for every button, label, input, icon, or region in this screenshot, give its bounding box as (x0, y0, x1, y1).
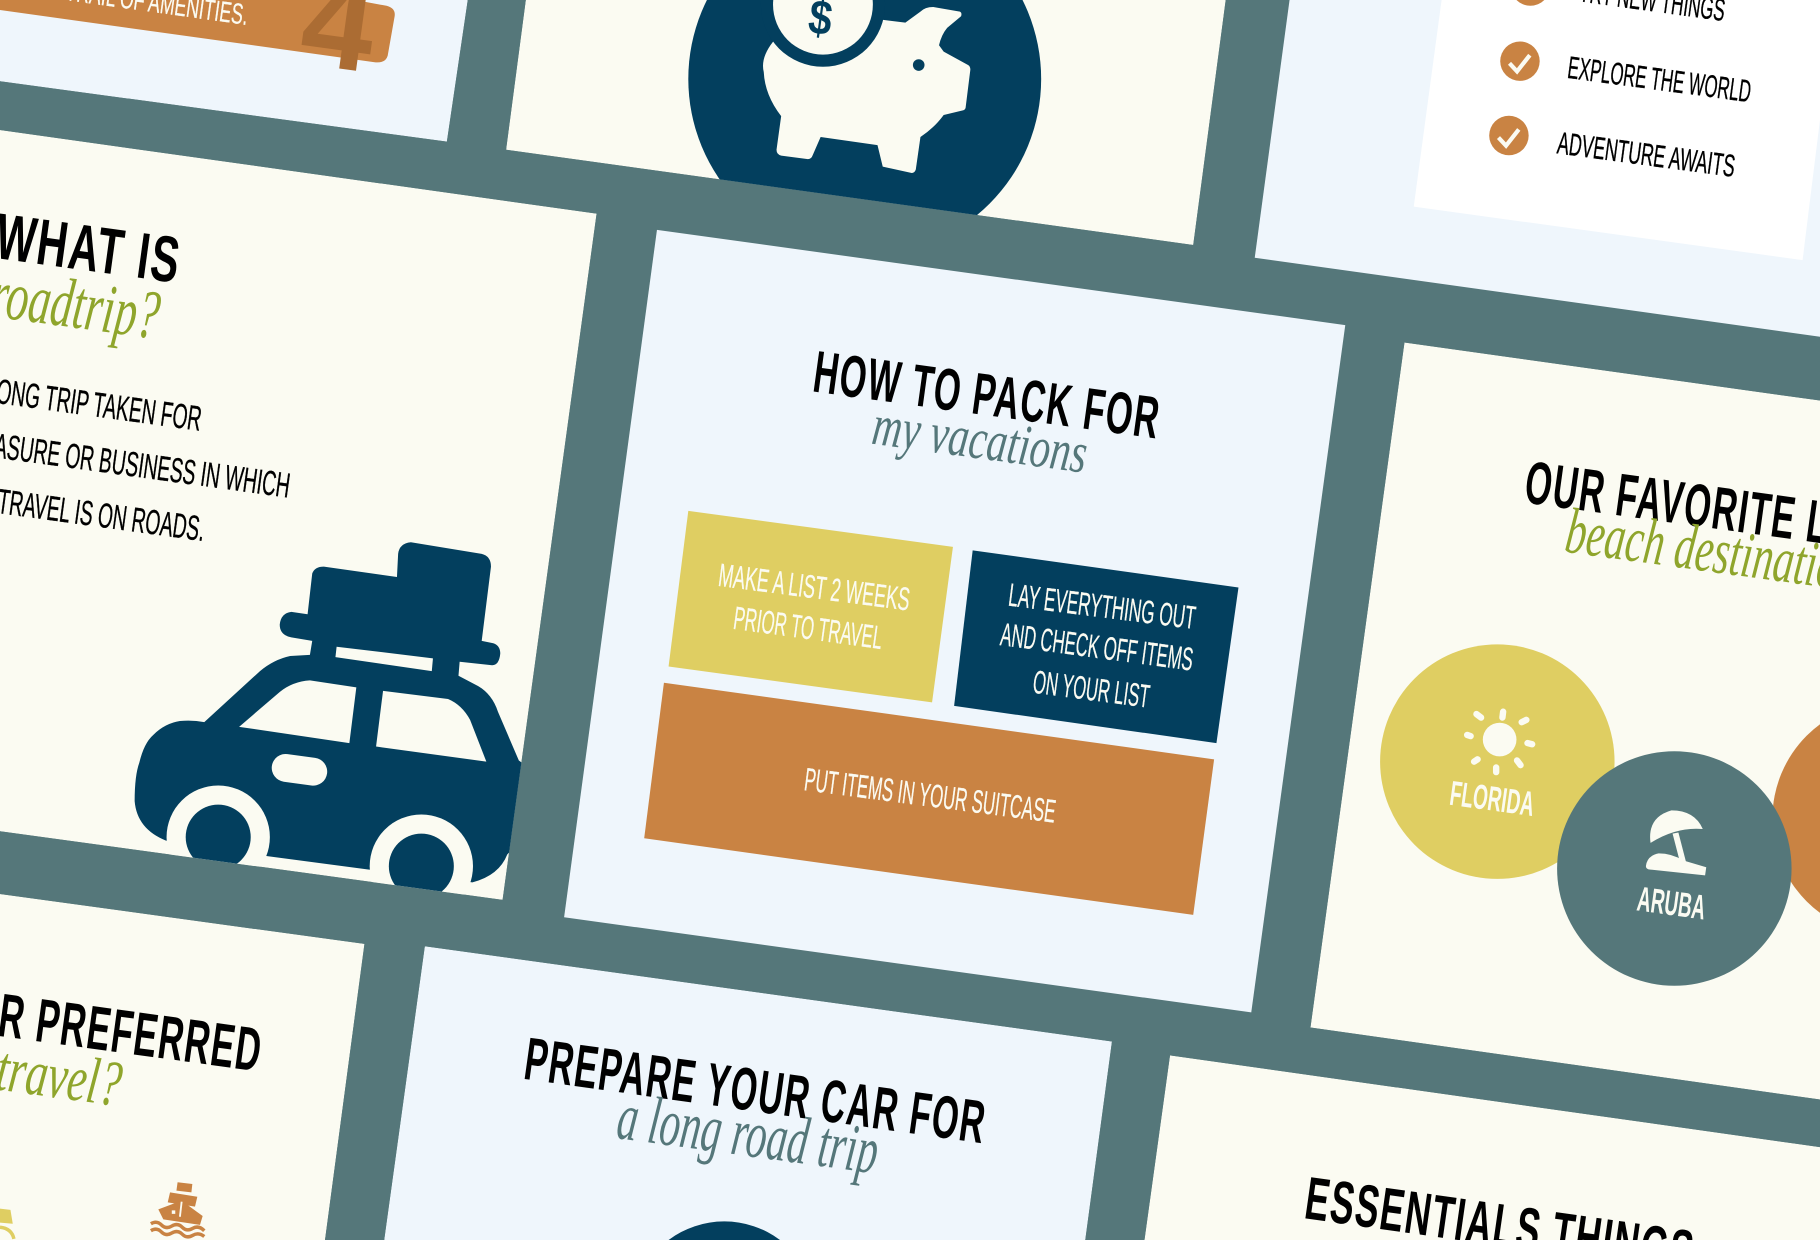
panel: prepare your car (384, 946, 1112, 1240)
check item: explore the world (1500, 41, 1753, 109)
card background (0, 0, 468, 142)
step 2: navy box: ON YOUR LIST (1031, 664, 1152, 715)
panel: checklist card (top right) (1255, 0, 1820, 337)
heading: what is: WHAT IS (0, 199, 186, 297)
navy circle (688, 0, 1042, 215)
icon: sun (1467, 712, 1532, 772)
panel: what is a roadtrip (0, 130, 597, 918)
icon: beach umbrella (1646, 810, 1706, 875)
icon: ship (151, 1182, 204, 1237)
panel: savings piggy bank (top middle) (506, 0, 1226, 255)
heading: how to pack for: HOW TO PACK FOR (810, 338, 1165, 452)
icon: yellow transport (0, 1209, 14, 1239)
heading: prepare your car for: PREPARE YOUR CAR FOR (521, 1024, 991, 1156)
panel: essentials things (1144, 1055, 1820, 1240)
step 1: yellow box: MAKE A LIST 2 WEEKS (716, 557, 912, 618)
check item: adventure awaits (1489, 116, 1737, 184)
step 2: navy box: LAY EVERYTHING OUT (1007, 577, 1198, 636)
step 2: navy box (954, 550, 1238, 743)
step 3: orange box: PUT ITEMS IN YOUR SUITCASE (802, 761, 1058, 830)
icon: car with luggage (135, 542, 536, 918)
step 2: navy box: AND CHECK OFF ITEMS (998, 616, 1195, 678)
card background (506, 0, 1226, 245)
panel: how to pack (564, 230, 1345, 1012)
card background (384, 946, 1112, 1240)
card background (1310, 343, 1820, 1100)
circle: aruba (1557, 751, 1792, 986)
card background (1255, 0, 1820, 337)
card background (0, 130, 597, 900)
orange tag (0, 0, 395, 62)
script: a long road trip: a long road trip (613, 1078, 883, 1188)
card background (1144, 1055, 1820, 1240)
card background (0, 894, 364, 1240)
check item: try new things (1511, 0, 1727, 28)
panel: favorite beach destinations (1310, 343, 1820, 1100)
step 1: yellow box (669, 511, 953, 702)
label: aruba: ARUBA (1635, 880, 1708, 927)
navy circle (669, 1221, 780, 1240)
script: my vacations: my vacations (869, 392, 1091, 486)
step 3: orange box (644, 683, 1214, 915)
card background (564, 230, 1345, 1012)
panel: preferred travel (0, 894, 364, 1240)
circle: florida (1380, 644, 1615, 879)
white list box (1414, 0, 1820, 260)
icon: piggy bank (761, 0, 970, 173)
label: florida: FLORIDA (1447, 774, 1537, 824)
body text (0, 380, 290, 541)
step 1: yellow box: PRIOR TO TRAVEL (731, 600, 885, 656)
circle: destination three (1773, 724, 1820, 913)
panel: amenities card (top left) (0, 0, 468, 142)
